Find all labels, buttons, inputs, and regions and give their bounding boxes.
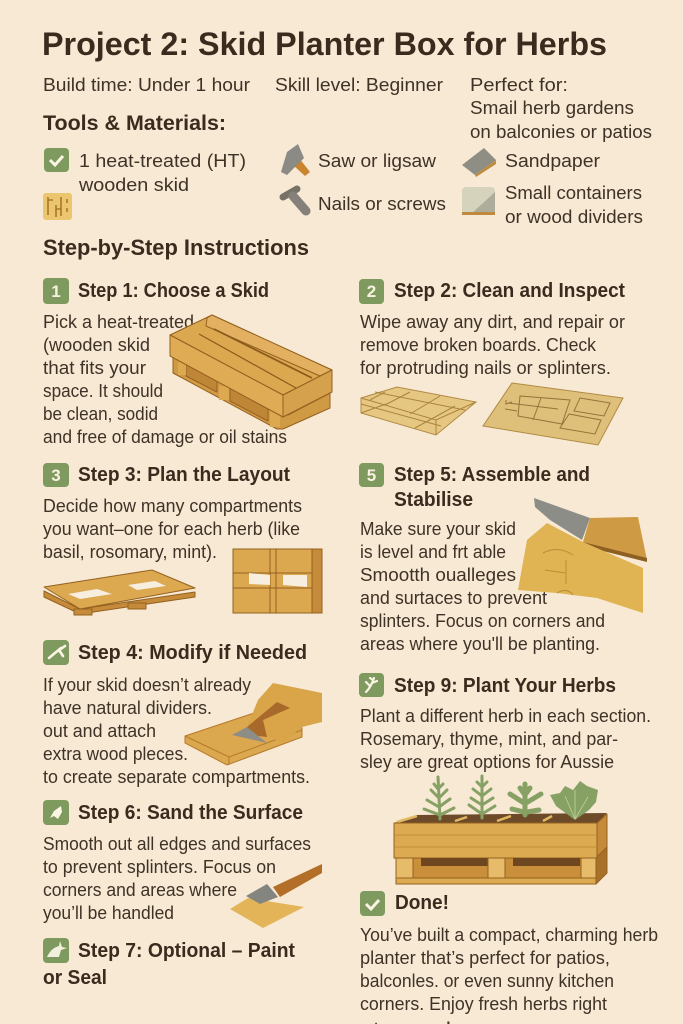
illustration: sander on sandpaper (230, 864, 322, 928)
text: step 1 body: Pick a heat-treated (43, 311, 194, 332)
text: step 3 body: Decide how many compartments (43, 495, 302, 516)
item: wooden skid (78, 150, 246, 195)
text: step 5 body: is level and frt able (360, 541, 506, 562)
text: step 1 last line: and free of damage or oil stains (43, 426, 287, 447)
plant: thyme (469, 776, 495, 818)
heading: step 3: Step 3: Plan the Layout (78, 463, 290, 486)
text: done body: You’ve built a compact, charming herb (360, 924, 658, 945)
illustration: upright pallet (233, 549, 322, 613)
heading: step 5 (394, 463, 590, 511)
text: step 2 body (360, 311, 625, 378)
text: step 6 body: Smooth out all edges and surfaces (43, 833, 311, 854)
icon: number 2: 2 (367, 282, 376, 301)
icon: number 3: 3 (51, 466, 61, 485)
item: containers: Small containers (505, 182, 642, 203)
text: step 5 body: and surtaces to prevent (360, 587, 547, 608)
plant: parsley (550, 781, 598, 820)
text: step 6 body: to prevent splinters. Focus on (43, 856, 276, 877)
text: step 4 body: to create separate compartments. (43, 766, 310, 787)
heading: step 1: Step 1: Choose a Skid (78, 279, 269, 302)
text: done body: balconles. or even sunny kitchen (360, 970, 614, 991)
panel: step 1 (43, 278, 332, 447)
panel: step 3 (43, 463, 322, 615)
text: step 1 body: that fits your (43, 357, 146, 378)
heading: done: Done! (395, 891, 449, 914)
project meta row (43, 74, 652, 142)
text: step 4 body: If your skid doesn’t already (43, 674, 252, 695)
panel: step 7 (43, 938, 295, 989)
plant: mint (510, 784, 541, 815)
text: step 5 body: areas where you'll be planting. (360, 633, 600, 654)
icon: number 1 (43, 278, 69, 304)
item: nails: Nails or screws (318, 193, 446, 214)
icon: number 5: 5 (367, 466, 376, 485)
icon: number 2 (359, 279, 384, 304)
text: step 9 body: Plant a different herb in each section. (360, 705, 651, 726)
illustration: hand with tool (518, 498, 647, 613)
icon: check (44, 148, 69, 172)
panel: step 4 (43, 640, 322, 787)
heading: step 7: Step 7: Optional – Paint (78, 939, 295, 962)
heading: step 9: Step 9: Plant Your Herbs (394, 674, 616, 697)
text: step 9 body: sley are great options for Aussie (360, 751, 614, 772)
panel: step 5 (359, 463, 647, 654)
icon: container (462, 187, 495, 215)
illustration: layout plan (483, 383, 623, 445)
panel: done (360, 891, 658, 1024)
project meta row: Smail herb gardens (470, 97, 634, 118)
icon: sanding block (43, 800, 69, 825)
text: step 6 body: you’ll be handled (43, 902, 174, 923)
title: Project 2: Skid Planter Box for Herbs (42, 26, 607, 62)
item: wooden skid: 1 heat-treated (HT) (79, 150, 246, 171)
illustration: wood board (361, 387, 476, 435)
panel: step 6 (43, 800, 322, 928)
text: step 4 body: extra wood pleces. (43, 743, 188, 764)
text: step 5 body: Make sure your skid (360, 518, 516, 539)
text: step 1 body: (wooden skid (43, 334, 150, 355)
icon: hammer (281, 144, 310, 176)
text: step 5 body: Smootth oualleges (360, 564, 516, 585)
item: saw: Saw or ligsaw (318, 150, 437, 171)
icon: number 5 (359, 463, 384, 487)
item: containers: or wood dividers (505, 206, 643, 227)
heading: step 7 (43, 939, 295, 989)
illustration: flat pallet (44, 570, 195, 615)
item: containers (505, 182, 643, 227)
icon: wrench (43, 640, 69, 665)
icon: wood block (43, 193, 72, 220)
item: wooden skid: wooden skid (78, 174, 189, 195)
text: step 2 body: for protruding nails or splinters. (360, 357, 611, 378)
project meta row: Perfect for: (470, 74, 568, 95)
text: step 2 body: Wipe away any dirt, and repair or (360, 311, 625, 332)
text: step 9 body: Rosemary, thyme, mint, and par- (360, 728, 618, 749)
panel: tools and materials (43, 112, 643, 227)
heading: step 5: Step 5: Assemble and (394, 463, 590, 486)
item: sandpaper: Sandpaper (505, 150, 600, 171)
text: step 3 body: you want–one for each herb (like (43, 518, 300, 539)
heading: step 6: Step 6: Sand the Surface (78, 801, 303, 824)
text: step 4 body: have natural dividers. (43, 697, 212, 718)
heading: tools and materials: Tools & Materials: (43, 112, 226, 135)
planter wood (394, 814, 607, 884)
icon: number 3 (43, 463, 69, 487)
text: step 6 body: corners and areas where (43, 879, 237, 900)
icon: number 1: 1 (51, 282, 61, 301)
icon: check (360, 891, 385, 916)
text: step 3 body: basil, rosomary, mint). (43, 541, 217, 562)
text: step 1 body: space. It should (43, 380, 163, 401)
illustration: wooden crate (170, 315, 332, 429)
text: done body: corners. Enjoy fresh herbs right (360, 993, 607, 1014)
panel: step 2 (359, 279, 625, 445)
text: step 1 body: be clean, sodid (43, 403, 158, 424)
panel: step 9 (359, 673, 651, 884)
text: step 3 body (43, 495, 302, 562)
text: step 1 body (43, 311, 194, 424)
icon: sprig (359, 673, 384, 697)
heading: step 2: Step 2: Clean and Inspect (394, 279, 625, 302)
text: step 6 body (43, 833, 311, 923)
icon: nail (283, 189, 306, 211)
text: step 5 body: splinters. Focus on corners and (360, 610, 605, 631)
project meta row: Build time: Under 1 hour (43, 74, 250, 95)
text: done body: planter that’s perfect for patios, (360, 947, 610, 968)
icon: brush (43, 938, 69, 963)
plant: rosemary (424, 777, 454, 819)
illustration: planter with herbs (394, 776, 607, 884)
project meta row: Skill level: Beginner (275, 74, 443, 95)
icon: sandpaper (462, 148, 496, 177)
text: step 4 body (43, 674, 310, 787)
text: step 4 body: out and attach (43, 720, 156, 741)
text: step 5 body (360, 518, 605, 654)
heading: step 5: Stabilise (394, 488, 473, 511)
heading: step-by-step instructions: Step-by-Step Instructions (43, 235, 309, 260)
heading: step 7: or Seal (43, 966, 107, 989)
illustration: board and hand (185, 683, 322, 765)
text: step 2 body: remove broken boards. Check (360, 334, 597, 355)
text: done body (360, 924, 658, 1024)
project meta row: on balconies or patios (470, 121, 652, 142)
heading: step 4: Step 4: Modify if Needed (78, 641, 307, 664)
text: step 9 body (360, 705, 651, 772)
